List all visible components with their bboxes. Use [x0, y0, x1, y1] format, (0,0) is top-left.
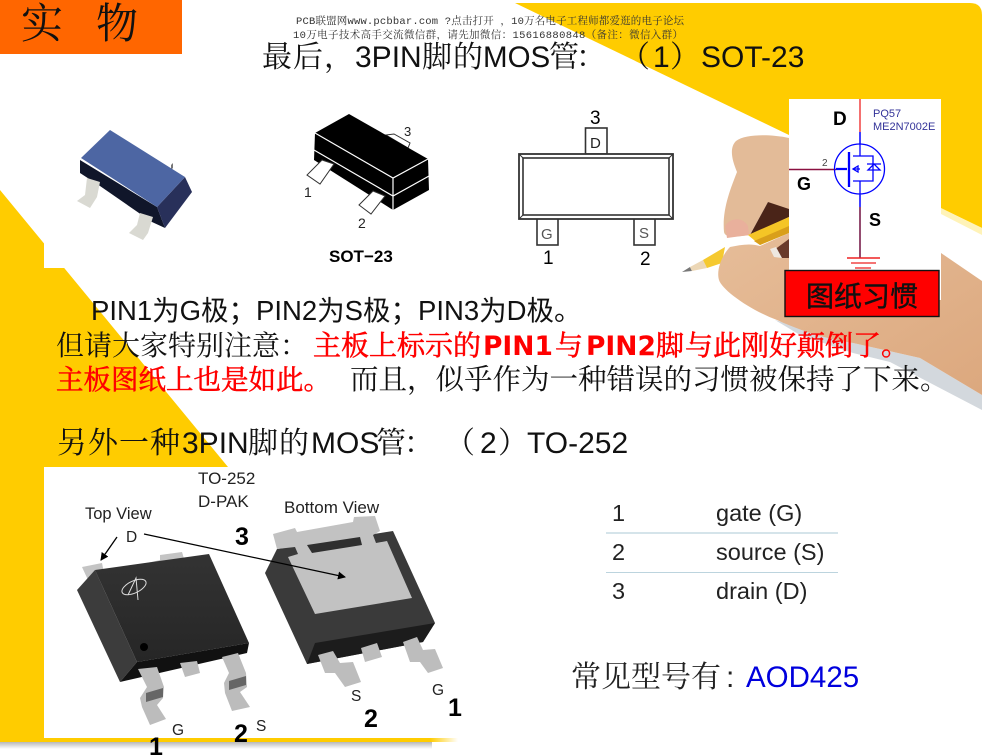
title: SOT-23: ） [670, 41, 700, 74]
pin table: 2 [612, 539, 625, 565]
hand holding pencil [682, 135, 982, 410]
heading: TO-252: MOS [311, 427, 379, 460]
TO-252 text labels and arrows: 2 [364, 705, 378, 733]
paragraph: pin assignment and note: 但请大家特别注意： [56, 330, 308, 361]
TO-252 text labels and arrows: 3 [235, 523, 249, 551]
heading: TO-252: TO-252 [527, 427, 628, 460]
diagram: SOT-23 3D outline: 1 [304, 184, 312, 200]
pin table: drain (D) [716, 578, 807, 604]
paragraph: pin assignment and note: PIN1 [483, 331, 553, 362]
pin: source lead [222, 653, 250, 711]
title: SOT-23: MOS [483, 41, 550, 74]
title: SOT-23: 1 [653, 41, 670, 74]
diagram: SOT-23 3D outline: 2 [358, 215, 366, 231]
TO-252 text labels and arrows: 2 [234, 720, 248, 748]
heading: TO-252: 脚的 [248, 427, 309, 460]
watermark text [293, 14, 684, 42]
diagram: SOT-23 footprint: D [590, 135, 601, 152]
common part number: : [726, 661, 734, 694]
paragraph: pin assignment and note: 主板上标示的 [313, 330, 481, 361]
photo: blue SOT-23 package [77, 130, 192, 240]
label: 图纸习惯: 图纸习惯 [806, 281, 918, 312]
heading: TO-252: ） [498, 427, 528, 460]
TO-252 text labels and arrows [85, 469, 462, 755]
logo [120, 576, 148, 600]
TO-252 text labels and arrows: Bottom View [284, 498, 380, 517]
paragraph: pin assignment and note: 主板图纸上也是如此。 [56, 364, 331, 395]
header tag: 实物 [0, 0, 182, 54]
heading: TO-252: 3PIN [182, 427, 249, 460]
pin table: source (S) [716, 539, 824, 565]
diagram: TO-252 top view [77, 552, 250, 725]
watermark text: 10万电子技术高手交流微信群，请先加微信：15616880848（备注：微信入群） [293, 28, 683, 42]
diagram: SOT-23 3D outline: SOT−23 [329, 247, 393, 266]
diagram: SOT-23 footprint [519, 108, 673, 270]
diagram: SOT-23 footprint: 3 [590, 108, 601, 129]
heading: TO-252: （ [445, 427, 475, 460]
header tag: 实物: 物 [96, 0, 138, 47]
diagram: SOT-23 3D outline [304, 114, 429, 266]
TO-252 text labels and arrows: S [256, 718, 266, 735]
label: 图纸习惯 [785, 270, 939, 316]
TO-252 text labels and arrows: S [351, 688, 361, 705]
paragraph: pin assignment and note: 与 [555, 330, 583, 361]
TO-252 text labels and arrows: D-PAK [198, 492, 249, 511]
pin table: 1 [612, 500, 625, 526]
schematic panel: G [797, 174, 811, 194]
TO-252 text labels and arrows: D [126, 529, 137, 546]
schematic panel [789, 99, 941, 271]
header tag: 实物: 实 [21, 0, 63, 47]
title: SOT-23: 脚的 [422, 41, 483, 74]
diagram: TO-252 bottom view [265, 516, 443, 687]
TO-252 text labels and arrows: TO-252 [198, 469, 255, 488]
schematic panel: D [833, 109, 847, 130]
mosfet symbol [834, 144, 884, 195]
title: SOT-23: （ [620, 41, 650, 74]
schematic panel: PQ57 [873, 108, 901, 120]
heading: TO-252: 管： [376, 427, 434, 460]
diagram: SOT-23 3D outline: 3 [404, 124, 411, 139]
paragraph: pin assignment and note: 脚 [656, 330, 684, 361]
common part number: 常见型号有 [571, 661, 721, 694]
TO-252 text labels and arrows: G [172, 722, 184, 739]
paragraph: pin assignment and note: PIN2 [586, 331, 656, 362]
schematic panel: ME2N7002E [873, 121, 935, 133]
paragraph: pin assignment and note [56, 295, 949, 396]
TO-252 text labels and arrows: G [432, 682, 444, 699]
pin: gate lead [138, 667, 166, 725]
title: SOT-23: 最后， [262, 41, 354, 74]
common part number: AOD425 [746, 661, 859, 694]
heading: TO-252: 2 [480, 427, 497, 460]
TO-252 text labels and arrows: Top View [85, 505, 152, 523]
title: SOT-23: 3PIN [355, 41, 422, 74]
paragraph: pin assignment and note: PIN1为G极；PIN2为S极；PIN3为D极。 [91, 295, 582, 326]
TO-252 text labels and arrows: 1 [448, 694, 462, 722]
diagram: SOT-23 footprint: 1 [543, 248, 554, 269]
title: SOT-23: 管： [549, 41, 606, 74]
schematic panel: 2 [822, 158, 828, 169]
schematic panel: S [869, 210, 881, 230]
diagram: SOT-23 footprint: 2 [640, 249, 651, 270]
pin table: gate (G) [716, 500, 802, 526]
heading: TO-252: 另外一种 [57, 427, 180, 460]
pin: middle stub [180, 661, 200, 677]
diagram: SOT-23 footprint: G [541, 226, 553, 243]
paragraph: pin assignment and note: 与此刚好颠倒了。 [685, 330, 909, 361]
diagram: SOT-23 footprint: S [639, 225, 649, 242]
white backing of SOT-23 photo [44, 90, 294, 268]
paragraph: pin assignment and note: 而且，似乎作为一种错误的习惯被保持了下来。 [350, 364, 949, 396]
title: SOT-23: SOT-23 [701, 41, 804, 74]
pin table [606, 500, 838, 604]
watermark text: PCB联盟网www.pcbbar.com ?点击打开 ，10万名电子工程师都爱逛的电子论坛 [296, 14, 684, 28]
pin table: 3 [612, 578, 625, 604]
